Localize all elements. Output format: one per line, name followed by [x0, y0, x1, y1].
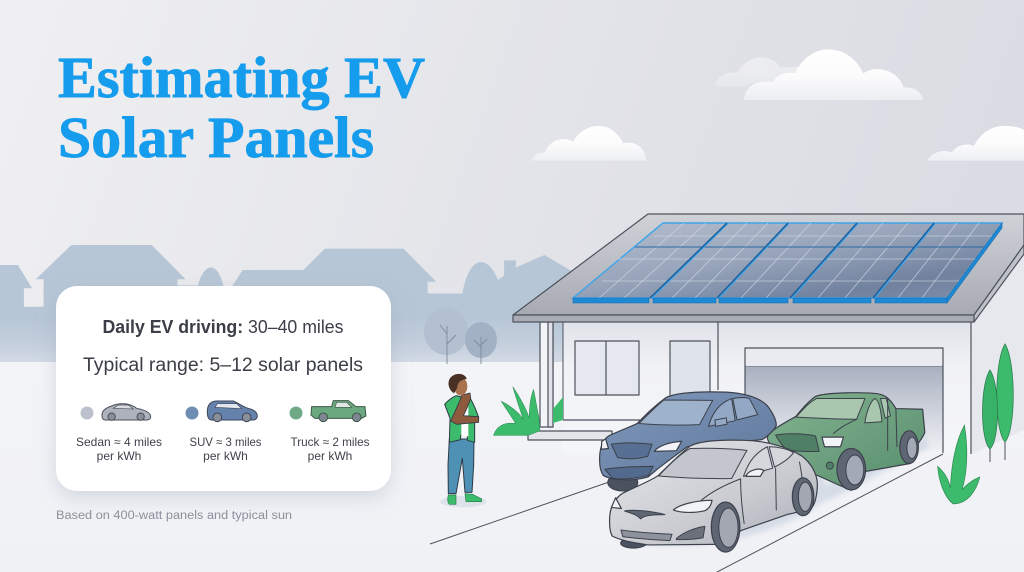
tree: large	[424, 307, 468, 364]
cloud: lower left	[532, 126, 646, 161]
plant: behind column	[553, 397, 563, 423]
undershirt	[461, 402, 468, 436]
footnote: Based on 400-watt panels and typical sun	[56, 510, 292, 522]
shirt	[445, 396, 479, 442]
truck legend: per kWh	[308, 449, 352, 463]
car: silver sedan	[610, 440, 817, 552]
cloud: large front	[744, 49, 923, 100]
porch step	[528, 431, 612, 440]
title line 2: Solar Panels	[58, 105, 374, 170]
sedan legend	[76, 404, 162, 463]
title	[58, 45, 425, 170]
car shadows	[618, 437, 930, 546]
truck legend: Truck ≈ 2 miles	[290, 435, 370, 449]
porch columns	[540, 322, 553, 427]
right side wall	[971, 248, 1024, 454]
shrub: short	[982, 370, 998, 462]
SUV legend: per kWh	[203, 449, 248, 463]
driveway edges	[430, 454, 943, 572]
daily driving line: Daily EV driving: 30–40 miles	[102, 317, 344, 337]
tall shrubs	[982, 344, 1013, 462]
shrub: tall	[997, 344, 1013, 460]
SUV legend	[186, 401, 262, 463]
SUV legend: SUV ≈ 3 miles	[190, 435, 262, 449]
distant neighbourhood silhouette	[0, 245, 575, 362]
solar panels	[573, 223, 1002, 303]
sedan legend: Sedan ≈ 4 miles	[76, 435, 162, 449]
shoes	[448, 494, 482, 504]
ground	[0, 362, 1024, 572]
typical range line: Typical range: 5–12 solar panels	[83, 355, 363, 376]
cloud: back faint	[715, 57, 798, 87]
truck: green pickup	[767, 393, 925, 490]
background trees	[424, 307, 497, 364]
sedan legend: per kWh	[97, 449, 141, 463]
arms	[451, 393, 479, 424]
info card	[56, 286, 391, 491]
window	[575, 341, 639, 395]
cloud: lower right	[927, 126, 1024, 161]
clouds	[532, 49, 1024, 161]
door	[670, 341, 710, 411]
jeans	[448, 439, 474, 494]
hair	[448, 374, 467, 393]
garage	[745, 348, 943, 453]
roof	[513, 214, 1024, 322]
person thinking	[440, 374, 487, 507]
cars	[600, 392, 925, 552]
truck legend	[290, 401, 370, 463]
car: blue SUV	[600, 392, 776, 491]
tree: small	[465, 322, 497, 364]
plant: foreground	[938, 425, 980, 504]
plant: bush by porch	[494, 387, 540, 435]
front wall	[563, 321, 971, 453]
title line 1: Estimating EV	[58, 45, 425, 110]
head	[454, 377, 467, 395]
house	[513, 214, 1024, 454]
